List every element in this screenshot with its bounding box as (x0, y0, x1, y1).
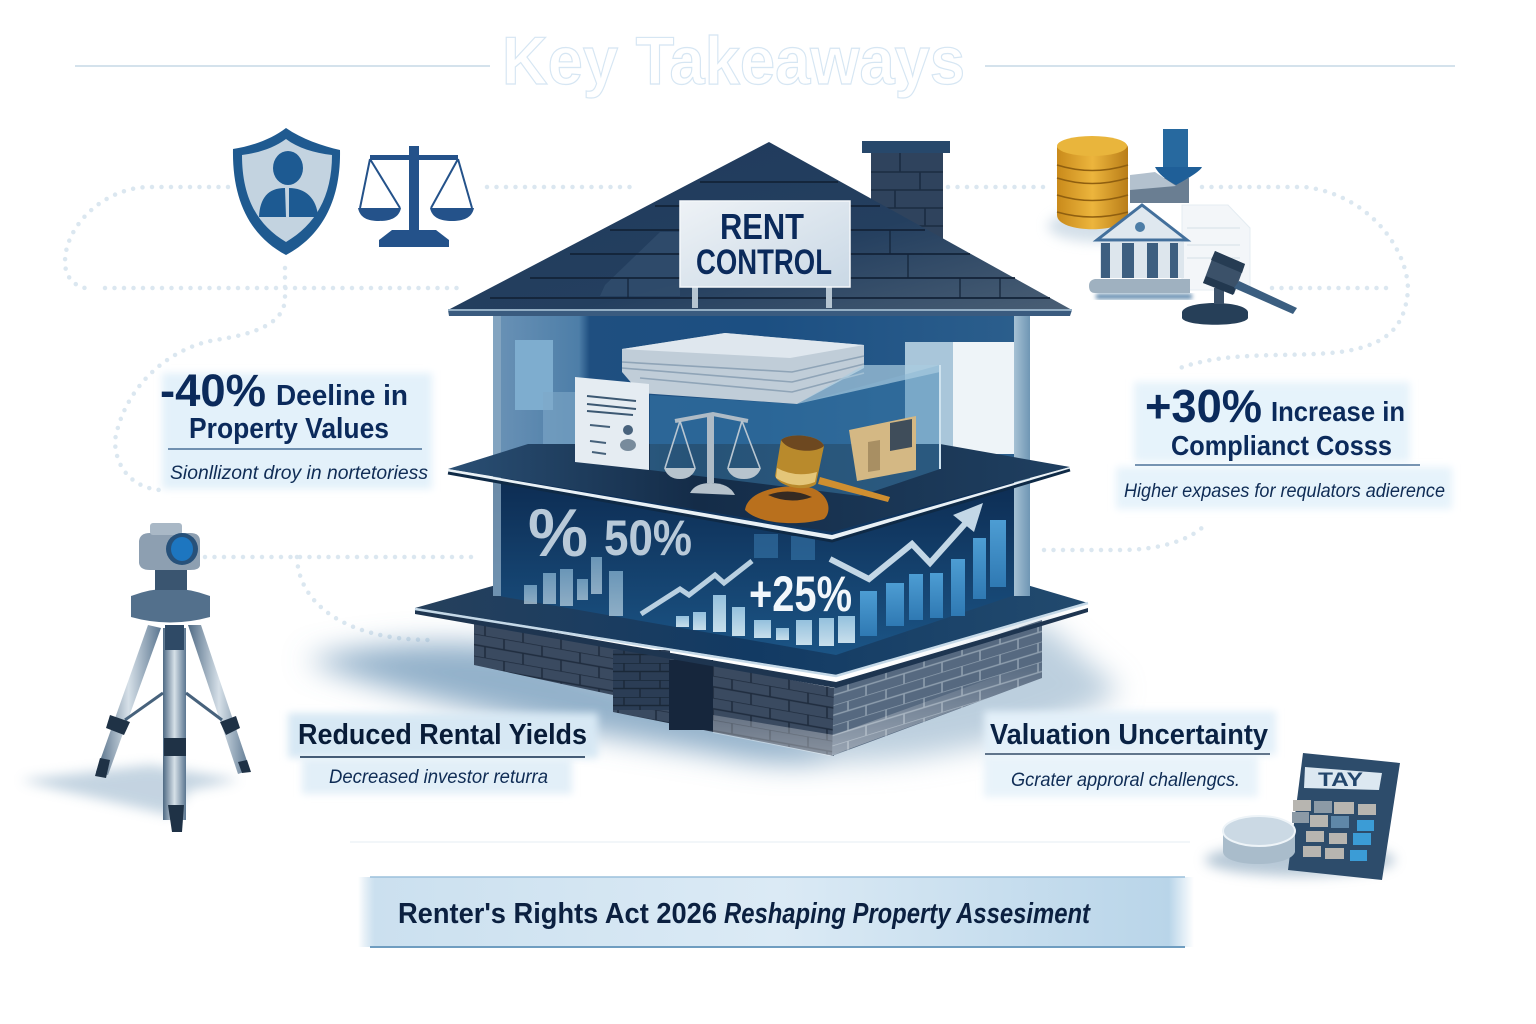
glass box and paper stack (622, 333, 940, 496)
scales in room (664, 414, 761, 495)
panel: reduced rental yields: Decreased investor returra (329, 767, 548, 788)
icon: tax calculator and coin: TAY (1318, 770, 1363, 791)
panel: property values: -40% (160, 365, 266, 416)
panel: reduced rental yields (288, 713, 598, 794)
chart text and trend arrows: 50% (604, 510, 692, 566)
panel: compliance costs: Complianct Cosss (1171, 430, 1392, 461)
panel: compliance costs: +30% (1145, 380, 1262, 432)
panel: property values: Deeline in (276, 380, 408, 412)
banner: bottom statement (350, 842, 1194, 947)
roof (448, 141, 1072, 316)
gavel (745, 435, 890, 523)
sign: rent control (680, 201, 850, 308)
middle floor slab (448, 444, 1070, 541)
title: Key Takeaways (502, 23, 965, 99)
icon: tax calculator and coin (1205, 753, 1400, 880)
sign: rent control: CONTROL (696, 243, 832, 282)
panel: reduced rental yields: Reduced Rental Yields (298, 719, 587, 751)
lower floor slab (415, 585, 1088, 688)
panel: valuation uncertainty (984, 711, 1276, 797)
panel: property values: Property Values (189, 413, 389, 445)
icon: coins, arrow, bank and gavel (1048, 129, 1297, 325)
foundation brick (474, 620, 1042, 756)
bar chart (524, 520, 1006, 646)
panel: property values (160, 365, 432, 489)
sign: rent control: RENT (720, 206, 804, 247)
icon: surveying tripod (20, 523, 251, 832)
house (305, 141, 1120, 763)
banner: bottom statement: Reshaping Property Assesiment (724, 898, 1091, 930)
ground shadow (305, 620, 1120, 763)
document (575, 377, 649, 470)
panel: valuation uncertainty: Gcrater approral challengcs. (1011, 770, 1240, 791)
panel: compliance costs: Higher expases for requlators adierence (1124, 481, 1445, 502)
upper room (493, 316, 1030, 476)
lower room wall (493, 470, 1030, 655)
panel: compliance costs (1116, 380, 1452, 509)
house pillars (493, 316, 1030, 596)
banner: bottom statement: Renter's Rights Act 2026 (398, 898, 717, 930)
panel: property values: Sionllizont droy in nortetoriess (170, 463, 428, 484)
chart text and trend arrows: % (528, 495, 588, 571)
cream box (849, 416, 916, 481)
panel: compliance costs: Increase in (1271, 396, 1405, 427)
chart text and trend arrows (528, 495, 983, 622)
panel: valuation uncertainty: Valuation Uncertainty (990, 719, 1268, 751)
dotted connector paths (65, 187, 1408, 640)
chart text and trend arrows: +25% (749, 566, 852, 622)
icon: shield with person (233, 128, 340, 255)
icon: scales of justice (358, 146, 474, 247)
